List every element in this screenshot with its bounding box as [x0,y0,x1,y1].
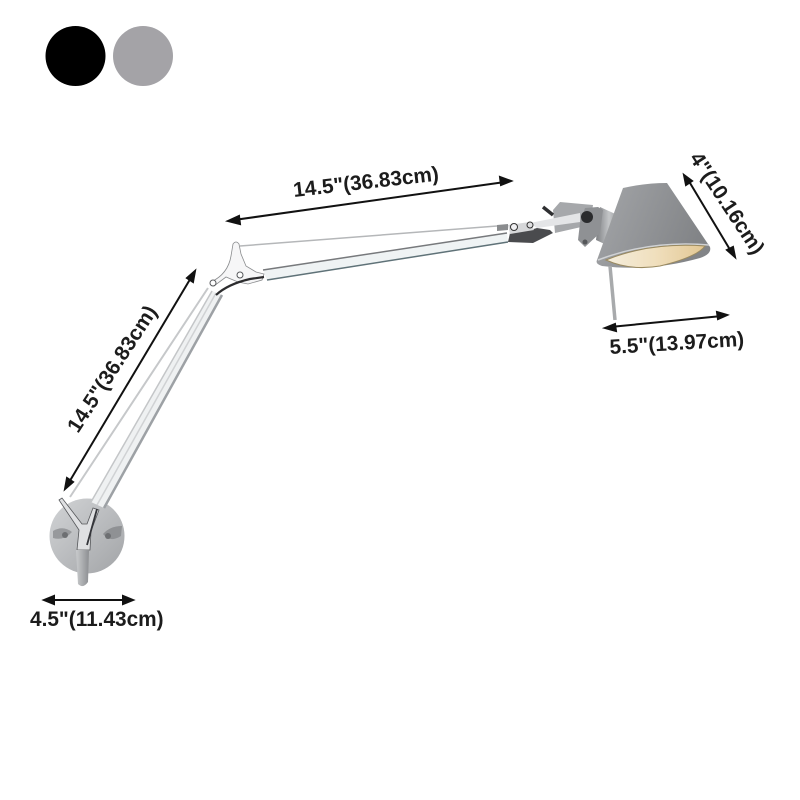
label: shade width: 5.5"(13.97cm) [609,328,745,359]
colour swatch: silver grey [113,26,173,86]
arrow: lower arm length [65,271,195,489]
arrow: arm upper width [228,177,511,224]
label: upper arm length: 14.5"(36.83cm) [292,163,440,202]
upper arm [240,224,508,280]
pull rod [610,266,615,320]
wall mount plate [50,498,124,586]
arrow: shade width [605,312,727,331]
arrow: shade height [684,175,735,257]
label: shade height: 4"(10.16cm) [685,148,769,259]
lamp shade [597,183,710,268]
elbow joint [210,242,264,295]
head joint [508,202,622,248]
lower arm [70,288,222,508]
dimension arrows [44,175,735,604]
label: lower arm length: 14.5"(36.83cm) [63,302,162,437]
arrow: base width [44,596,133,604]
colour swatch: black [46,26,106,86]
label: base width: 4.5"(11.43cm) [30,608,164,631]
